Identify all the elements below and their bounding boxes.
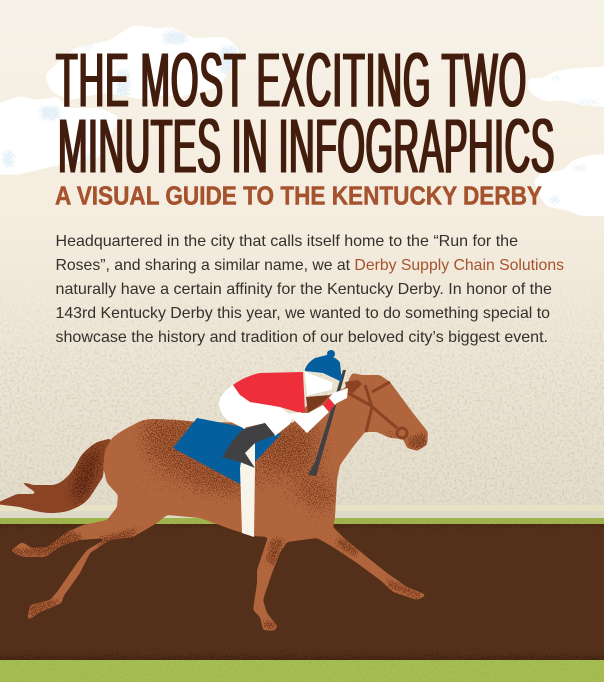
jockey pants <box>219 385 293 436</box>
saddle cloth <box>173 418 281 484</box>
riding whip <box>308 370 346 476</box>
horse body <box>12 374 428 631</box>
intro text block: naturally have a certain affinity for the Kentucky Derby. In honor of the <box>56 281 552 298</box>
horse and jockey <box>0 350 428 631</box>
intro text block: showcase the history and tradition of our beloved city’s biggest event. <box>56 329 548 346</box>
jockey hand <box>329 388 348 405</box>
jockey boot <box>222 423 275 468</box>
subtitle: A VISUAL GUIDE TO THE KENTUCKY DERBY <box>55 182 542 210</box>
intro text block: Roses”, and sharing a similar name, we at Derby Supply Chain Solutions <box>56 257 564 274</box>
title: THE MOST EXCITING TWO <box>56 37 526 123</box>
jockey shirt <box>233 372 305 412</box>
jockey face <box>304 371 333 396</box>
neck shadow wedge <box>306 395 330 413</box>
intro text block <box>56 233 564 346</box>
dirt track <box>0 524 604 660</box>
clouds <box>0 26 604 216</box>
horse tail <box>0 439 111 513</box>
jockey cuff <box>323 398 335 412</box>
intro text block: Headquartered in the city that calls itself home to the “Run for the <box>56 233 518 250</box>
grass strip behind the horse <box>0 518 604 524</box>
foreground grass <box>0 660 604 682</box>
jockey cap <box>305 350 342 382</box>
bridle <box>348 382 407 438</box>
sky background <box>0 187 604 518</box>
title: MINUTES IN INFOGRAPHICS <box>58 103 554 189</box>
girth <box>240 427 255 537</box>
title <box>56 37 554 189</box>
jockey arm <box>290 405 329 433</box>
intro text block: 143rd Kentucky Derby this year, we wanted to do something special to <box>56 305 550 322</box>
forelock <box>345 380 362 393</box>
